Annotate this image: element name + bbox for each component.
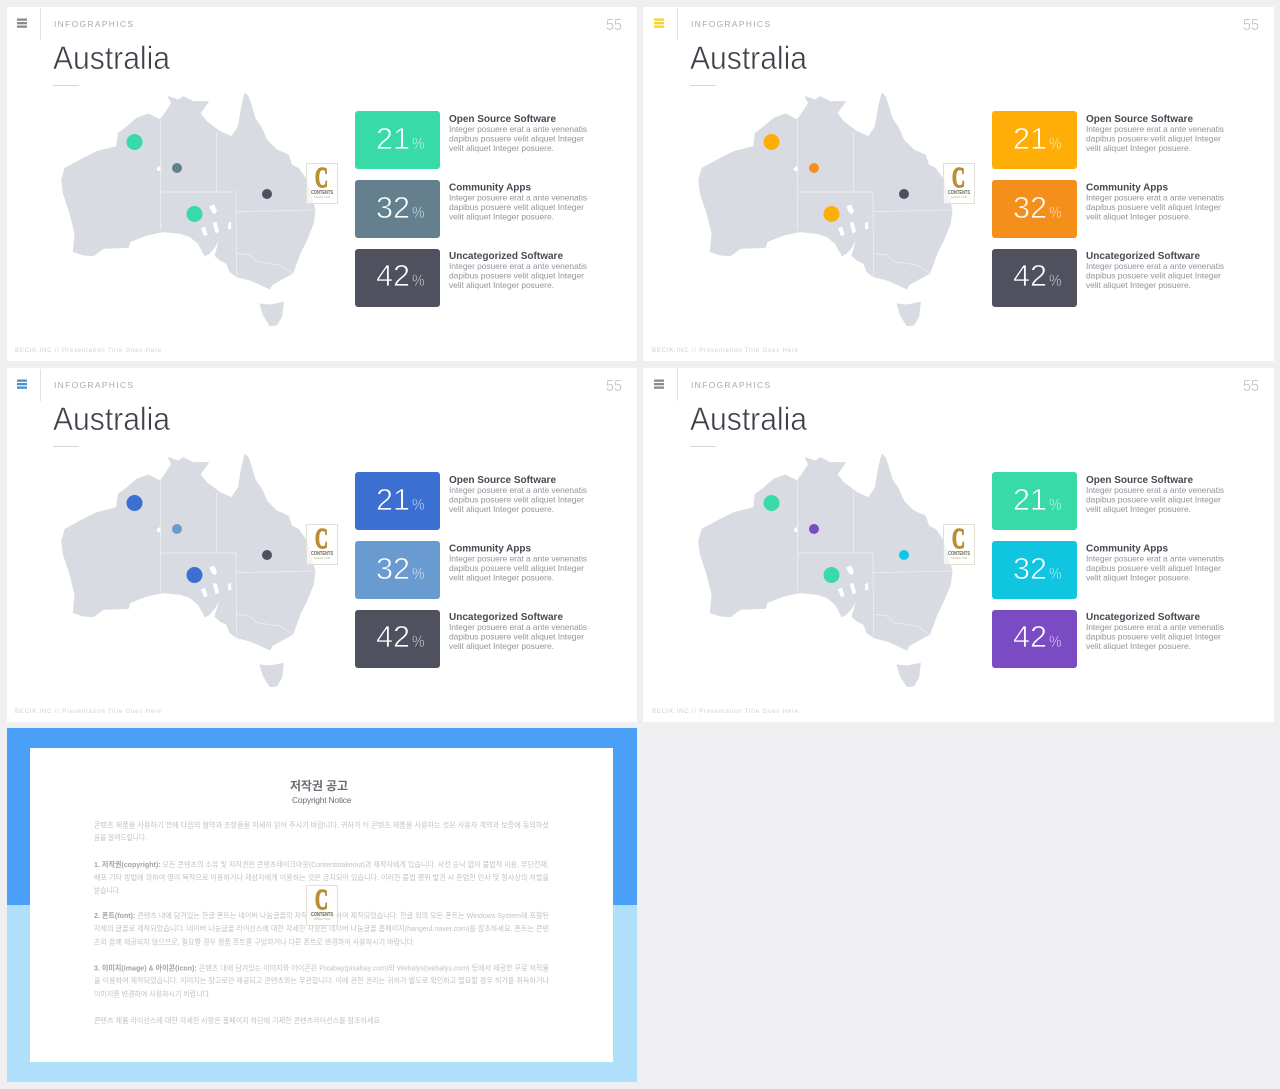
stat card 21%: % (1049, 134, 1062, 153)
text: community apps: Integer posuere erat a ante venenatis (1086, 554, 1224, 564)
stat card 21%: % (412, 495, 424, 514)
text: uncategorized software (1086, 612, 1224, 651)
stat card 21%: % (412, 134, 424, 153)
text: community apps: Community Apps (1086, 544, 1168, 554)
stat card 32% (355, 541, 440, 599)
stat card 32% (992, 541, 1077, 599)
stat card 21%: 21 (376, 482, 410, 517)
panel: slide 1 green (7, 7, 637, 361)
text: community apps (1086, 182, 1224, 222)
text: community apps: dapibus posuere velit aliquet Integer (1086, 202, 1221, 212)
text: uncategorized software: velit aliquet Integer posuere. (449, 280, 554, 290)
notice body (94, 820, 549, 1025)
notice sheet (30, 748, 613, 1062)
text: uncategorized software: dapibus posuere velit aliquet Integer (1086, 632, 1221, 642)
stat card 42% (355, 249, 440, 307)
notice body: 을 이용하여 제작되었습니다. 이미지는 참고로만 제공되고 콘텐츠와는 무관합니다. 이에 관한 권리는 귀하가 별도로 확인하고 필요할 경우 허가를 취득하거나 (94, 976, 549, 985)
stat card 32%: 32 (376, 190, 410, 225)
footer: BECIK.INC // Presentation Title Goes Here (15, 348, 162, 354)
stat card 32%: 32 (1013, 190, 1047, 225)
stat card 42% (355, 610, 440, 668)
text: community apps: dapibus posuere velit aliquet Integer (449, 563, 584, 573)
stat card 21% (355, 472, 440, 530)
stat card 21%: % (1049, 495, 1062, 514)
stat card 21%: 21 (1013, 121, 1047, 156)
stat card 42% (992, 249, 1077, 307)
stat card 42%: % (412, 632, 424, 651)
notice heading: 저작권 공고 (290, 778, 348, 793)
page number: 55 (606, 17, 622, 34)
watermark logo: C (315, 885, 328, 916)
stat card 42%: % (412, 271, 424, 290)
notice body: 콘텐츠 제품을 사용하기 전에 다음의 협약과 조항들을 자세히 읽어 주시기 바랍니다. 귀하가 이 콘텐츠 제품을 사용하는 것은 사용자 계약과 보증에 동의하셨 (94, 820, 549, 830)
notice body: 이미지를 변경하여 사용하시기 바랍니다. (94, 990, 211, 998)
stat card 32%: 32 (376, 551, 410, 586)
notice body: 2. 폰트(font): 콘텐츠 내에 담겨있는 한글 폰트는 네이버 나눔글꼴의 저작권을 준수하여 제작되었습니다. 한글 외의 모든 폰트는 Windows System에 포함된 (94, 911, 549, 920)
notice body: 자체의 글꼴로 제작되었습니다. 네이버 나눔글꼴 라이선스에 대한 자세한 사항은 네이버 나눔글꼴 홈페이지(hangeul.naver.com)를 참조하세요. 폰트는 콘텐 (94, 924, 549, 933)
text: open source software: velit aliquet Integer posuere. (449, 143, 554, 153)
watermark logo: CONTENTS (948, 551, 971, 557)
watermark logo: NAVER.COM (314, 557, 330, 560)
stat card 21% (992, 111, 1077, 169)
text: community apps: Integer posuere erat a ante venenatis (1086, 192, 1224, 202)
watermark logo: NAVER.COM (951, 557, 967, 560)
stat card 21%: 21 (1013, 482, 1047, 517)
slide background (643, 368, 1274, 722)
map markers (126, 495, 272, 583)
footer: BECIK.INC // Presentation Title Goes Here (652, 348, 799, 354)
notice body: 받습니다. (94, 886, 121, 895)
watermark logo (306, 163, 338, 204)
text: community apps: velit aliquet Integer posuere. (449, 572, 554, 582)
text: open source software: velit aliquet Integer posuere. (1086, 143, 1191, 153)
footer: BECIK.INC // Presentation Title Goes Here (652, 709, 799, 715)
stat card 32%: % (1049, 564, 1062, 583)
text: open source software: dapibus posuere velit aliquet Integer (449, 494, 584, 504)
text: uncategorized software: velit aliquet Integer posuere. (1086, 641, 1191, 651)
title: Australia (53, 40, 170, 76)
map of Australia (62, 454, 315, 687)
notice body: 배포 기타 방법에 의하여 영리 목적으로 이용하거나 제삼자에게 이용하는 것은 금지되어 있습니다. 이러한 불법 행위 발견 시 준엄한 민사 및 형사상의 처벌을 (94, 873, 549, 882)
text: open source software (1086, 475, 1224, 514)
backdrop dark blue band (7, 728, 637, 905)
map of Australia (699, 93, 952, 326)
text: open source software: Integer posuere erat a ante venenatis (449, 124, 587, 134)
watermark logo: CONTENTS (311, 551, 334, 557)
stat card 32%: % (412, 564, 424, 583)
text: uncategorized software: Integer posuere erat a ante venenatis (1086, 622, 1224, 632)
text: open source software: Integer posuere erat a ante venenatis (1086, 124, 1224, 134)
watermark logo: NAVER.COM (314, 918, 330, 921)
text: open source software: Integer posuere erat a ante venenatis (1086, 485, 1224, 495)
page number: 55 (606, 378, 622, 395)
text: community apps: Community Apps (449, 544, 531, 554)
panel: slide 2 orange (643, 7, 1274, 361)
page number: 55 (1243, 17, 1259, 34)
notice body: 콘텐츠 제품 라이선스에 대한 자세한 사항은 홈페이지 하단에 기재한 콘텐츠라이선스를 참조하세요. (94, 1016, 382, 1025)
title: Australia (690, 401, 807, 437)
section label: INFOGRAPHICS (54, 19, 133, 29)
stat card 42%: 42 (1013, 619, 1047, 654)
stat card 42%: % (1049, 632, 1062, 651)
notice body: 1. 저작권(copyright): 모든 콘텐츠의 소유 및 저작권은 콘텐츠테이크아웃(Contentstakeout)과 제작자에게 있습니다. 사전 승낙 없이 불법적 이용, 무단전재, (94, 860, 549, 869)
stat card 32% (992, 180, 1077, 238)
panel: copyright notice (7, 728, 637, 1082)
slide background (7, 7, 637, 361)
text: community apps (1086, 544, 1224, 582)
text: uncategorized software: velit aliquet Integer posuere. (1086, 280, 1191, 290)
notice subheading: Copyright Notice (292, 795, 352, 805)
text: uncategorized software: Integer posuere erat a ante venenatis (449, 261, 587, 271)
icon: menu (654, 380, 664, 389)
watermark logo: CONTENTS (311, 912, 334, 918)
text: community apps: velit aliquet Integer posuere. (449, 212, 554, 222)
icon: menu (17, 380, 27, 389)
text: community apps: Community Apps (449, 182, 531, 194)
text: uncategorized software: Uncategorized Software (1086, 251, 1200, 262)
text: open source software: dapibus posuere velit aliquet Integer (449, 134, 584, 144)
stat card 21%: 21 (376, 121, 410, 156)
text: community apps: velit aliquet Integer posuere. (1086, 572, 1191, 582)
section label: INFOGRAPHICS (54, 380, 133, 390)
watermark logo (944, 163, 974, 204)
text: open source software: velit aliquet Integer posuere. (449, 504, 554, 514)
stat card 32% (355, 180, 440, 238)
watermark logo (306, 524, 338, 564)
text: community apps: dapibus posuere velit aliquet Integer (449, 202, 584, 212)
watermark logo: CONTENTS (948, 190, 971, 196)
stat card 32%: % (412, 203, 424, 222)
watermark logo: C (952, 524, 965, 555)
text: uncategorized software: velit aliquet Integer posuere. (449, 641, 554, 651)
map markers (126, 134, 272, 222)
text: open source software: Open Source Software (1086, 114, 1193, 125)
text: open source software: dapibus posuere velit aliquet Integer (1086, 134, 1221, 144)
watermark logo (306, 885, 338, 926)
notice body: 3. 이미지(image) & 아이콘(icon): 콘텐츠 내에 담겨있는 이미지와 아이콘은 Pixabay(pixabay.com)와 Webalys(webalys.com) 등에서 제공한 무료 저작물 (94, 964, 549, 972)
icon: menu (654, 18, 664, 28)
stat card 42%: 42 (376, 619, 410, 654)
stat card 32%: % (1049, 203, 1062, 222)
stat card 32%: 32 (1013, 551, 1047, 586)
text: community apps: dapibus posuere velit aliquet Integer (1086, 563, 1221, 573)
map markers (764, 495, 909, 583)
slide background (643, 7, 1274, 361)
text: open source software (1086, 114, 1224, 153)
map of Australia (62, 93, 315, 326)
text: uncategorized software: Uncategorized Software (1086, 612, 1200, 623)
panel: slide 3 blue (7, 368, 637, 722)
footer: BECIK.INC // Presentation Title Goes Here (15, 709, 162, 715)
text: open source software: Open Source Software (1086, 475, 1193, 486)
text: uncategorized software: dapibus posuere velit aliquet Integer (449, 632, 584, 642)
watermark logo: NAVER.COM (314, 196, 330, 199)
backdrop light blue band (7, 905, 637, 1082)
text: open source software: Open Source Software (449, 475, 556, 486)
text: community apps (449, 182, 587, 222)
text: open source software: Integer posuere erat a ante venenatis (449, 485, 587, 495)
map markers (764, 134, 909, 222)
text: community apps: Integer posuere erat a ante venenatis (449, 192, 587, 202)
icon: menu (17, 18, 27, 28)
section label: INFOGRAPHICS (691, 19, 770, 29)
watermark logo: CONTENTS (311, 190, 334, 196)
text: open source software: velit aliquet Integer posuere. (1086, 504, 1191, 514)
text: uncategorized software: dapibus posuere velit aliquet Integer (449, 270, 584, 280)
stat card 42%: % (1049, 271, 1062, 290)
panel: slide 4 multicolour (643, 368, 1274, 722)
text: uncategorized software: Uncategorized Software (449, 251, 563, 262)
text: uncategorized software: Integer posuere erat a ante venenatis (1086, 261, 1224, 271)
map of Australia (699, 454, 952, 687)
slide background (7, 368, 637, 722)
text: community apps: Community Apps (1086, 182, 1168, 194)
watermark logo (944, 524, 974, 564)
section label: INFOGRAPHICS (691, 380, 770, 390)
title: Australia (53, 401, 170, 437)
text: open source software (449, 114, 587, 153)
text: open source software: dapibus posuere velit aliquet Integer (1086, 494, 1221, 504)
title: Australia (690, 40, 807, 76)
text: open source software: Open Source Software (449, 114, 556, 125)
text: uncategorized software (449, 251, 587, 290)
watermark logo: C (952, 163, 965, 194)
text: community apps: velit aliquet Integer posuere. (1086, 212, 1191, 222)
notice body: 츠와 함께 제공되지 않으므로, 필요할 경우 정품 폰트를 구입하거나 다른 폰트로 변경하여 사용하시기 바랍니다. (94, 938, 415, 946)
stat card 42%: 42 (376, 258, 410, 293)
watermark logo: NAVER.COM (951, 196, 967, 199)
page number: 55 (1243, 378, 1259, 395)
text: uncategorized software (449, 612, 587, 651)
text: uncategorized software: Integer posuere erat a ante venenatis (449, 622, 587, 632)
stat card 21% (355, 111, 440, 169)
text: open source software (449, 475, 587, 514)
text: community apps (449, 544, 587, 582)
stat card 21% (992, 472, 1077, 530)
stat card 42%: 42 (1013, 258, 1047, 293)
text: community apps: Integer posuere erat a ante venenatis (449, 554, 587, 564)
watermark logo: C (315, 524, 328, 555)
text: uncategorized software (1086, 251, 1224, 290)
text: uncategorized software: Uncategorized Software (449, 612, 563, 623)
notice body: 음을 알려드립니다. (94, 833, 147, 842)
stat card 42% (992, 610, 1077, 668)
text: uncategorized software: dapibus posuere velit aliquet Integer (1086, 270, 1221, 280)
watermark logo: C (315, 163, 328, 194)
